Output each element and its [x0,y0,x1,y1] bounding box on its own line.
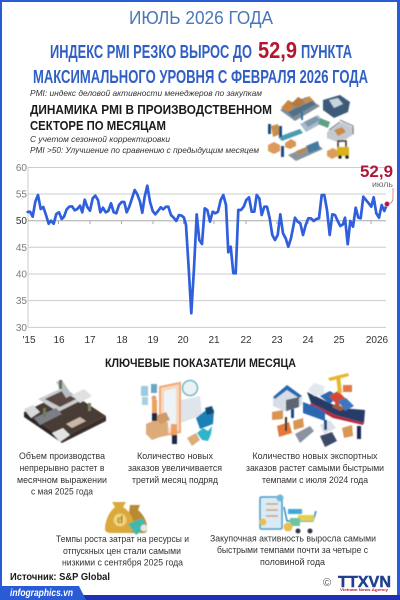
icon: money bags: d [117,515,123,526]
caption: purchasing activity: половиной года [260,557,326,568]
caption: purchasing activity: Закупочная активность выросла самыми [210,534,376,544]
y axis labels [16,163,27,334]
x axis labels: 24 [302,335,314,346]
y axis labels: 60 [16,163,27,174]
caption: production: Объем производства [19,451,106,462]
main title [33,37,368,87]
y axis labels: 30 [16,323,27,334]
y axis labels: 50 [16,216,27,227]
caption: new orders: заказов увеличивается [128,463,222,474]
icon: cargo ship and warehouse [272,373,365,447]
y axis labels: 55 [16,190,27,200]
y axis labels: 35 [16,296,27,307]
x axis labels: 16 [53,335,65,346]
x axis labels: 22 [240,335,252,346]
caption: export orders: темпами с июля 2024 года [262,475,369,486]
caption: new orders: Количество новых [137,451,213,462]
source: Источник: S&P Global [10,571,110,583]
chart notes: PMI >50: Улучшение по сравнению с предыдущим месяцем [30,145,259,155]
x axis labels [22,335,389,346]
logo: TTXVN: TTXVN [338,574,391,591]
logo: TTXVN: Vietnam News Agency [340,588,388,592]
icon: orders and delivery [141,380,214,446]
footer bar [0,586,400,600]
caption: purchasing activity [210,534,376,568]
callout: latest value [360,162,393,206]
caption: new orders [128,451,222,486]
main title: ПУНКТА [301,42,352,62]
caption: export orders: Количество новых экспортных [252,451,378,462]
caption: costs and prices [56,534,189,568]
PMI line [28,186,387,313]
main title: 52,9 [258,37,297,63]
caption: export orders [246,451,384,486]
x axis labels: 17 [84,335,96,346]
chart notes: С учетом сезонной корректировки [30,134,170,144]
chart notes [30,134,259,155]
caption: purchasing activity: быстрыми темпами почти за четыре с [217,545,368,556]
callout: latest value: 52,9 [360,162,393,181]
PMI definition: PMI: индекс деловой активности менеджеров по закупкам [30,88,262,98]
chart heading [30,102,272,133]
caption: production: непрерывно растет в [20,463,104,474]
main title: ИНДЕКС PMI РЕЗКО ВЫРОС ДО [50,42,252,62]
x axis labels: 21 [208,335,220,346]
caption: costs and prices: низкими с сентября 2025 года [62,558,184,568]
caption: production [17,451,107,498]
logo: TTXVN: © [323,577,331,589]
y axis labels: 40 [16,270,27,280]
icon: money bags [105,502,148,535]
section heading: КЛЮЧЕВЫЕ ПОКАЗАТЕЛИ МЕСЯЦА [105,358,296,370]
caption: production: с мая 2025 года [31,486,94,498]
icon: factory production line [268,95,354,161]
icon: machine platform [24,380,106,443]
callout: latest value: июль [372,180,393,189]
caption: export orders: заказов растет самыми быстрыми [246,463,384,474]
icon: clipboard and shopping cart [260,494,316,534]
footer bar: infographics.vn [10,588,73,599]
caption: production: месячном выражении [17,475,107,486]
line chart: PMI by month [16,162,393,346]
caption: costs and prices: Темпы роста затрат на ресурсы и [56,534,189,545]
x axis labels: '15 [22,335,36,346]
x axis labels: 25 [333,335,345,346]
x axis labels: 20 [177,335,189,346]
x axis labels: 18 [116,335,128,346]
chart heading: ДИНАМИКА PMI В ПРОИЗВОДСТВЕННОМ [30,102,272,117]
x axis labels: 23 [271,335,283,346]
date heading: ИЮЛЬ 2026 ГОДА [129,8,273,28]
caption: costs and prices: отпускных цен стали самыми [63,546,181,557]
chart heading: СЕКТОРЕ ПО МЕСЯЦАМ [30,118,166,133]
caption: new orders: третий месяц подряд [132,475,218,486]
y axis labels: 45 [16,243,27,254]
x axis labels: 19 [147,335,159,346]
x axis labels: 2026 [366,335,389,346]
